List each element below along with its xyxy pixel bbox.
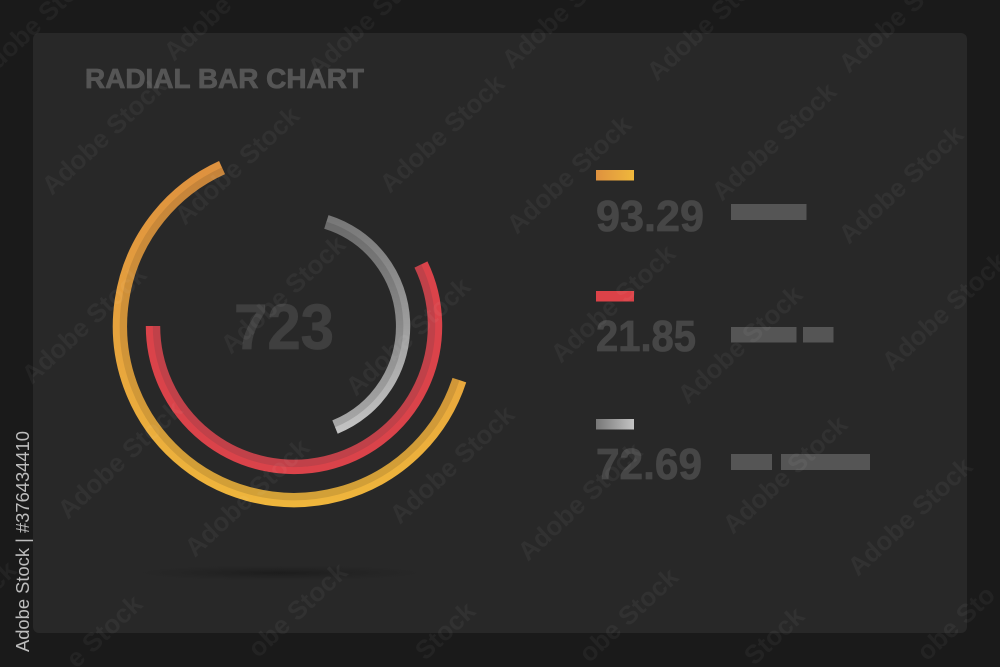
chart shadow xyxy=(130,565,430,581)
watermarks: Adobe Stock xyxy=(179,432,316,563)
placeholder bar xyxy=(731,204,806,220)
watermarks: Adobe Stock xyxy=(374,68,511,199)
watermarks: Adobe Stock xyxy=(512,436,649,567)
arc: red 21.85 xyxy=(150,263,438,470)
legend row: grey xyxy=(596,419,870,489)
watermarks: Adobe Stock xyxy=(52,394,189,525)
watermarks: obe Stock xyxy=(242,556,353,663)
watermarks: Adobe Stock xyxy=(169,100,306,231)
center total: 723 xyxy=(234,291,334,363)
value: 93.29: 93.29 xyxy=(596,192,704,241)
legend row: red xyxy=(596,291,834,361)
watermarks: obe Stock xyxy=(573,561,684,667)
legend swatch: grey xyxy=(596,419,634,430)
legend row: orange xyxy=(596,170,806,241)
watermarks: Adobe Stock xyxy=(215,229,352,360)
placeholder bars xyxy=(731,327,834,342)
watermarks: Stock xyxy=(409,595,481,666)
value: 21.85: 21.85 xyxy=(596,312,696,361)
watermarks: Adobe Stock xyxy=(501,109,638,240)
watermarks: Adobe Stock xyxy=(340,271,477,402)
stock id: Adobe Stock | #376434410 xyxy=(12,431,33,652)
watermarks: Adobe Stock xyxy=(717,409,854,540)
title: RADIAL BAR CHART xyxy=(85,63,364,94)
legend swatch: orange xyxy=(596,170,634,180)
watermarks: Adobe Stock xyxy=(545,238,682,369)
placeholder bars xyxy=(731,454,870,470)
watermarks: Adobe Stock xyxy=(842,451,979,582)
watermarks: Adobe Stock xyxy=(16,259,153,390)
arc: orange-yellow 93.29 xyxy=(116,164,463,504)
watermarks: Adobe Stock xyxy=(833,119,970,250)
watermarks: Adobe Stock xyxy=(36,70,173,201)
arc: grey 72.69 xyxy=(325,219,407,430)
watermarks: Adobe Stock xyxy=(384,399,521,530)
radial bar chart xyxy=(116,164,463,504)
legend swatch: red xyxy=(596,291,634,302)
watermarks: Adobe Stock xyxy=(672,279,809,410)
watermarks: obe Sto xyxy=(911,579,1000,666)
watermarks: Adobe Stock xyxy=(706,76,843,207)
value: 72.69: 72.69 xyxy=(596,440,702,489)
